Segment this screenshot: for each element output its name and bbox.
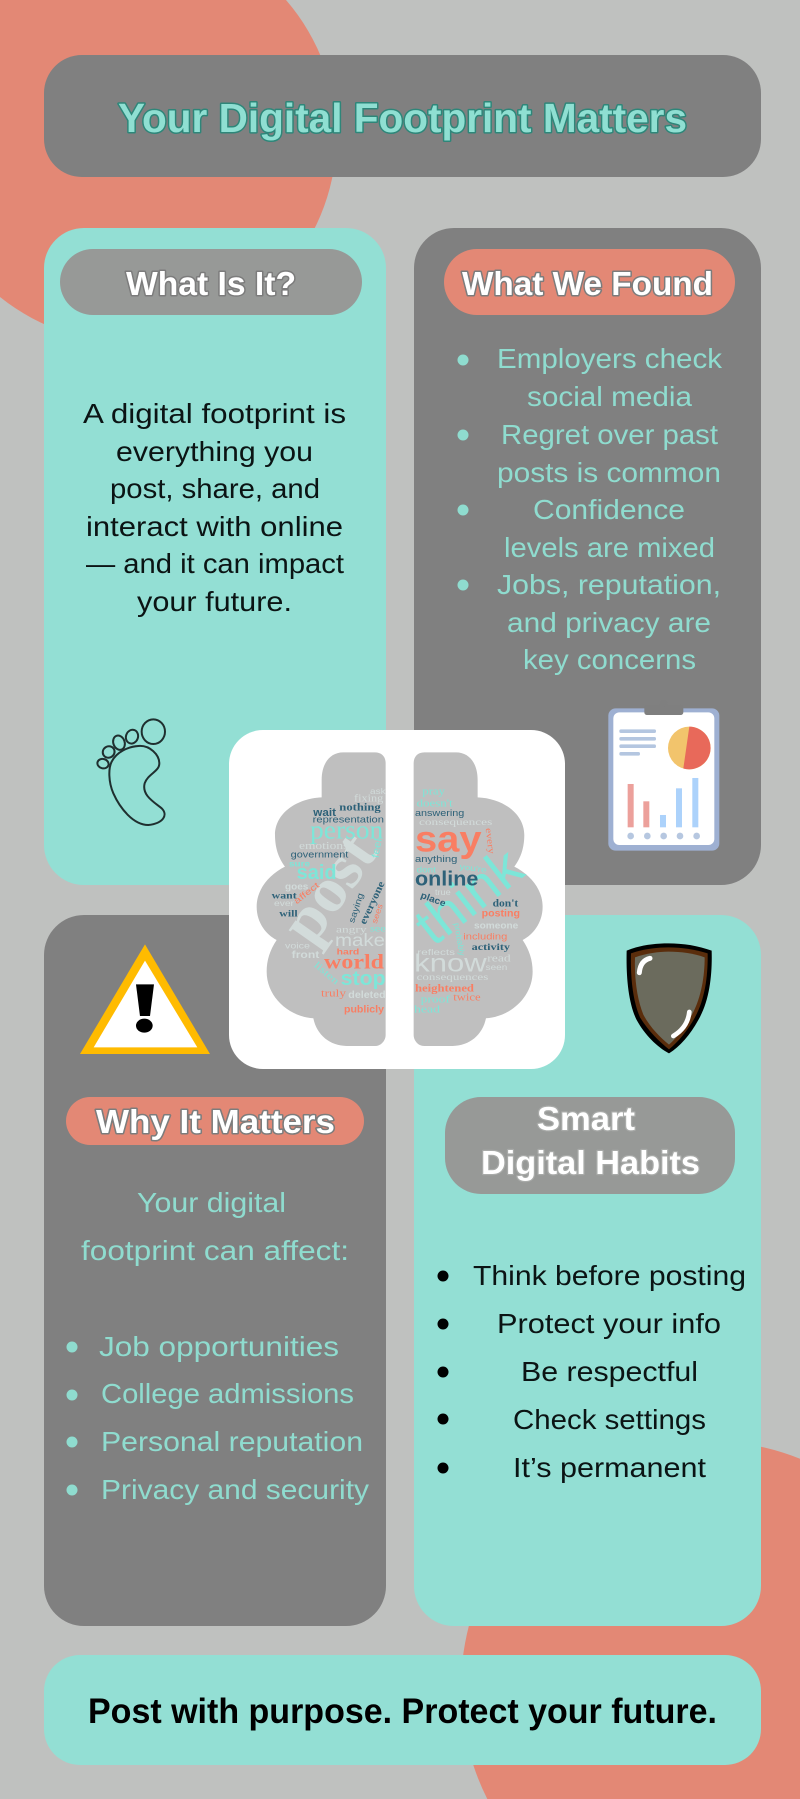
decorative coral circle top left (0, 0, 337, 343)
word cloud: right words: reflects (417, 947, 456, 957)
word cloud: right words: dont (417, 866, 437, 875)
word cloud: right words: twice (453, 993, 481, 1004)
word cloud: left words: publicly (344, 1004, 384, 1015)
word cloud: left words: representation (313, 814, 384, 824)
heading: smart digital habits (481, 1100, 700, 1181)
bullet list: findings: key concerns (523, 644, 696, 675)
bullet list: findings: levels are mixed (504, 532, 715, 563)
bullet list: findings: and privacy are (507, 607, 711, 638)
title: Your Digital Footprint Matters (118, 95, 687, 141)
word cloud: left words: emotions (299, 841, 348, 852)
text block: definition: post, share, and (110, 473, 320, 504)
word cloud: left words: listen (311, 960, 341, 987)
word cloud: left words: feel (370, 838, 385, 859)
heading: why it matters: Why It Matters (96, 1103, 335, 1140)
footer banner (44, 1655, 761, 1765)
word cloud: right words: posting (482, 909, 520, 920)
icon: warning triangle (80, 944, 210, 1054)
word cloud: right words: heightened (415, 984, 474, 995)
text block: intro: Your digital (137, 1187, 286, 1218)
word cloud: left words: post (266, 820, 390, 956)
bullet list: impacts: Privacy and security (101, 1474, 369, 1505)
bullet list: findings: social media (527, 381, 692, 412)
title banner (44, 55, 761, 177)
decorative coral circle bottom right (461, 1441, 800, 1799)
word cloud: right words: activity (472, 943, 510, 953)
heading: smart digital habits: Digital Habits (481, 1144, 700, 1181)
word cloud: left words: saying (346, 891, 365, 924)
bullet list: findings (458, 343, 723, 675)
bullet list: findings: Employers check (497, 343, 723, 374)
word cloud: right words: doesn't (417, 799, 453, 810)
panel: what is it (44, 228, 386, 885)
word cloud: left words: voice (285, 942, 311, 951)
word cloud: right words: anything (415, 854, 457, 864)
icon: footprint (96, 719, 165, 825)
heading: smart digital habits: Smart (537, 1100, 635, 1137)
word cloud: left words: fixing (354, 793, 383, 804)
bullet list: findings: Jobs, reputation, (497, 569, 721, 600)
text block: definition: — and it can impact (86, 548, 344, 579)
icon: shield (627, 943, 712, 1053)
bullet list: impacts: Job opportunities (99, 1331, 339, 1362)
bullet list: findings: Regret over past (501, 419, 718, 450)
word cloud: left words: wait (312, 807, 336, 819)
word cloud: right words: proof (421, 995, 451, 1006)
word cloud: left words: nothing (339, 803, 381, 814)
brain left lobe (257, 752, 386, 1046)
word cloud: left words: front (292, 950, 320, 961)
heading: what is it: What Is It? (126, 265, 296, 302)
word cloud: left words: see (370, 925, 386, 935)
word cloud: right words: answering (415, 808, 464, 818)
word cloud: left words: person (310, 816, 383, 845)
word cloud: right words: including (463, 931, 507, 941)
bullet list: habits: Check settings (513, 1404, 706, 1435)
panel: brain word cloud (229, 730, 565, 1069)
word cloud: right words: seen (486, 963, 507, 972)
word cloud: right words: place (419, 890, 447, 908)
text block: definition (83, 398, 346, 617)
word cloud: left words: want (272, 892, 298, 902)
word cloud: right words: consequences (419, 818, 493, 828)
bullet list: impacts: College admissions (101, 1378, 354, 1409)
word cloud: right words: probably (452, 922, 467, 956)
word cloud: right words: head (414, 1005, 441, 1016)
panel: why it matters (44, 915, 386, 1626)
word cloud: right words: pray (422, 787, 446, 798)
word cloud: left words: hard (337, 946, 359, 956)
word cloud: left words: government (291, 850, 349, 860)
bullet list: findings: posts is common (497, 457, 721, 488)
word cloud: left words: angry (336, 925, 367, 935)
word cloud: right words: you're (459, 862, 488, 875)
word cloud: left words: goes (285, 881, 308, 891)
word cloud: left words: said (297, 862, 337, 884)
text block: definition: A digital footprint is (83, 398, 346, 429)
bullet list: impacts: Personal reputation (101, 1426, 363, 1457)
word cloud: right words: say (415, 819, 482, 860)
word cloud: left words: sure (289, 859, 310, 869)
bullet list: impacts (66, 1331, 369, 1505)
word cloud: right words (403, 787, 534, 1016)
word cloud: left words: world (324, 951, 385, 973)
bullet list: habits: Protect your info (497, 1308, 721, 1339)
word cloud: right words: don't (493, 899, 519, 910)
panel: what we found (414, 228, 761, 885)
word cloud: left words: ever (274, 899, 294, 908)
word cloud: right words: read (487, 954, 511, 965)
text block: definition: everything you (116, 436, 313, 467)
word cloud: left words: make (335, 930, 385, 950)
word cloud: right words: every (483, 827, 496, 855)
word cloud: left words: affect (292, 879, 322, 906)
text block: intro: footprint can affect: (81, 1235, 349, 1266)
bullet list: findings: Confidence (533, 494, 685, 525)
word cloud: left words: everyone (358, 880, 388, 926)
word cloud: left words (266, 786, 390, 1015)
bullet list: habits (438, 1260, 746, 1483)
text block: definition: your future. (137, 586, 292, 617)
word cloud: left words: deleted (348, 990, 386, 1001)
word cloud: right words: online (415, 868, 478, 891)
word cloud: right words: consequences (417, 973, 489, 983)
word cloud: right words: someone (474, 920, 518, 930)
word cloud: left words: truly (321, 989, 347, 1000)
word cloud: left words: stop (341, 967, 386, 990)
text block: intro (81, 1187, 349, 1266)
bullet list: habits: Be respectful (521, 1356, 698, 1387)
word cloud: right words: true (435, 888, 451, 897)
bullet list: habits: It’s permanent (513, 1452, 706, 1483)
word cloud: left words: ask (370, 786, 386, 796)
bullet list: habits: Think before posting (473, 1260, 746, 1291)
footer slogan: Post with purpose. Protect your future. (88, 1692, 717, 1731)
panel: smart digital habits (414, 915, 761, 1626)
word cloud: right words: know (414, 951, 487, 978)
brain right lobe (414, 752, 543, 1046)
word cloud: left words: will (279, 910, 298, 920)
word cloud: left words: sees (370, 903, 385, 925)
text block: definition: interact with online (86, 511, 343, 542)
heading: what we found: What We Found (462, 265, 713, 302)
icon: clipboard report (608, 700, 719, 851)
word cloud: right words: think (403, 835, 534, 957)
